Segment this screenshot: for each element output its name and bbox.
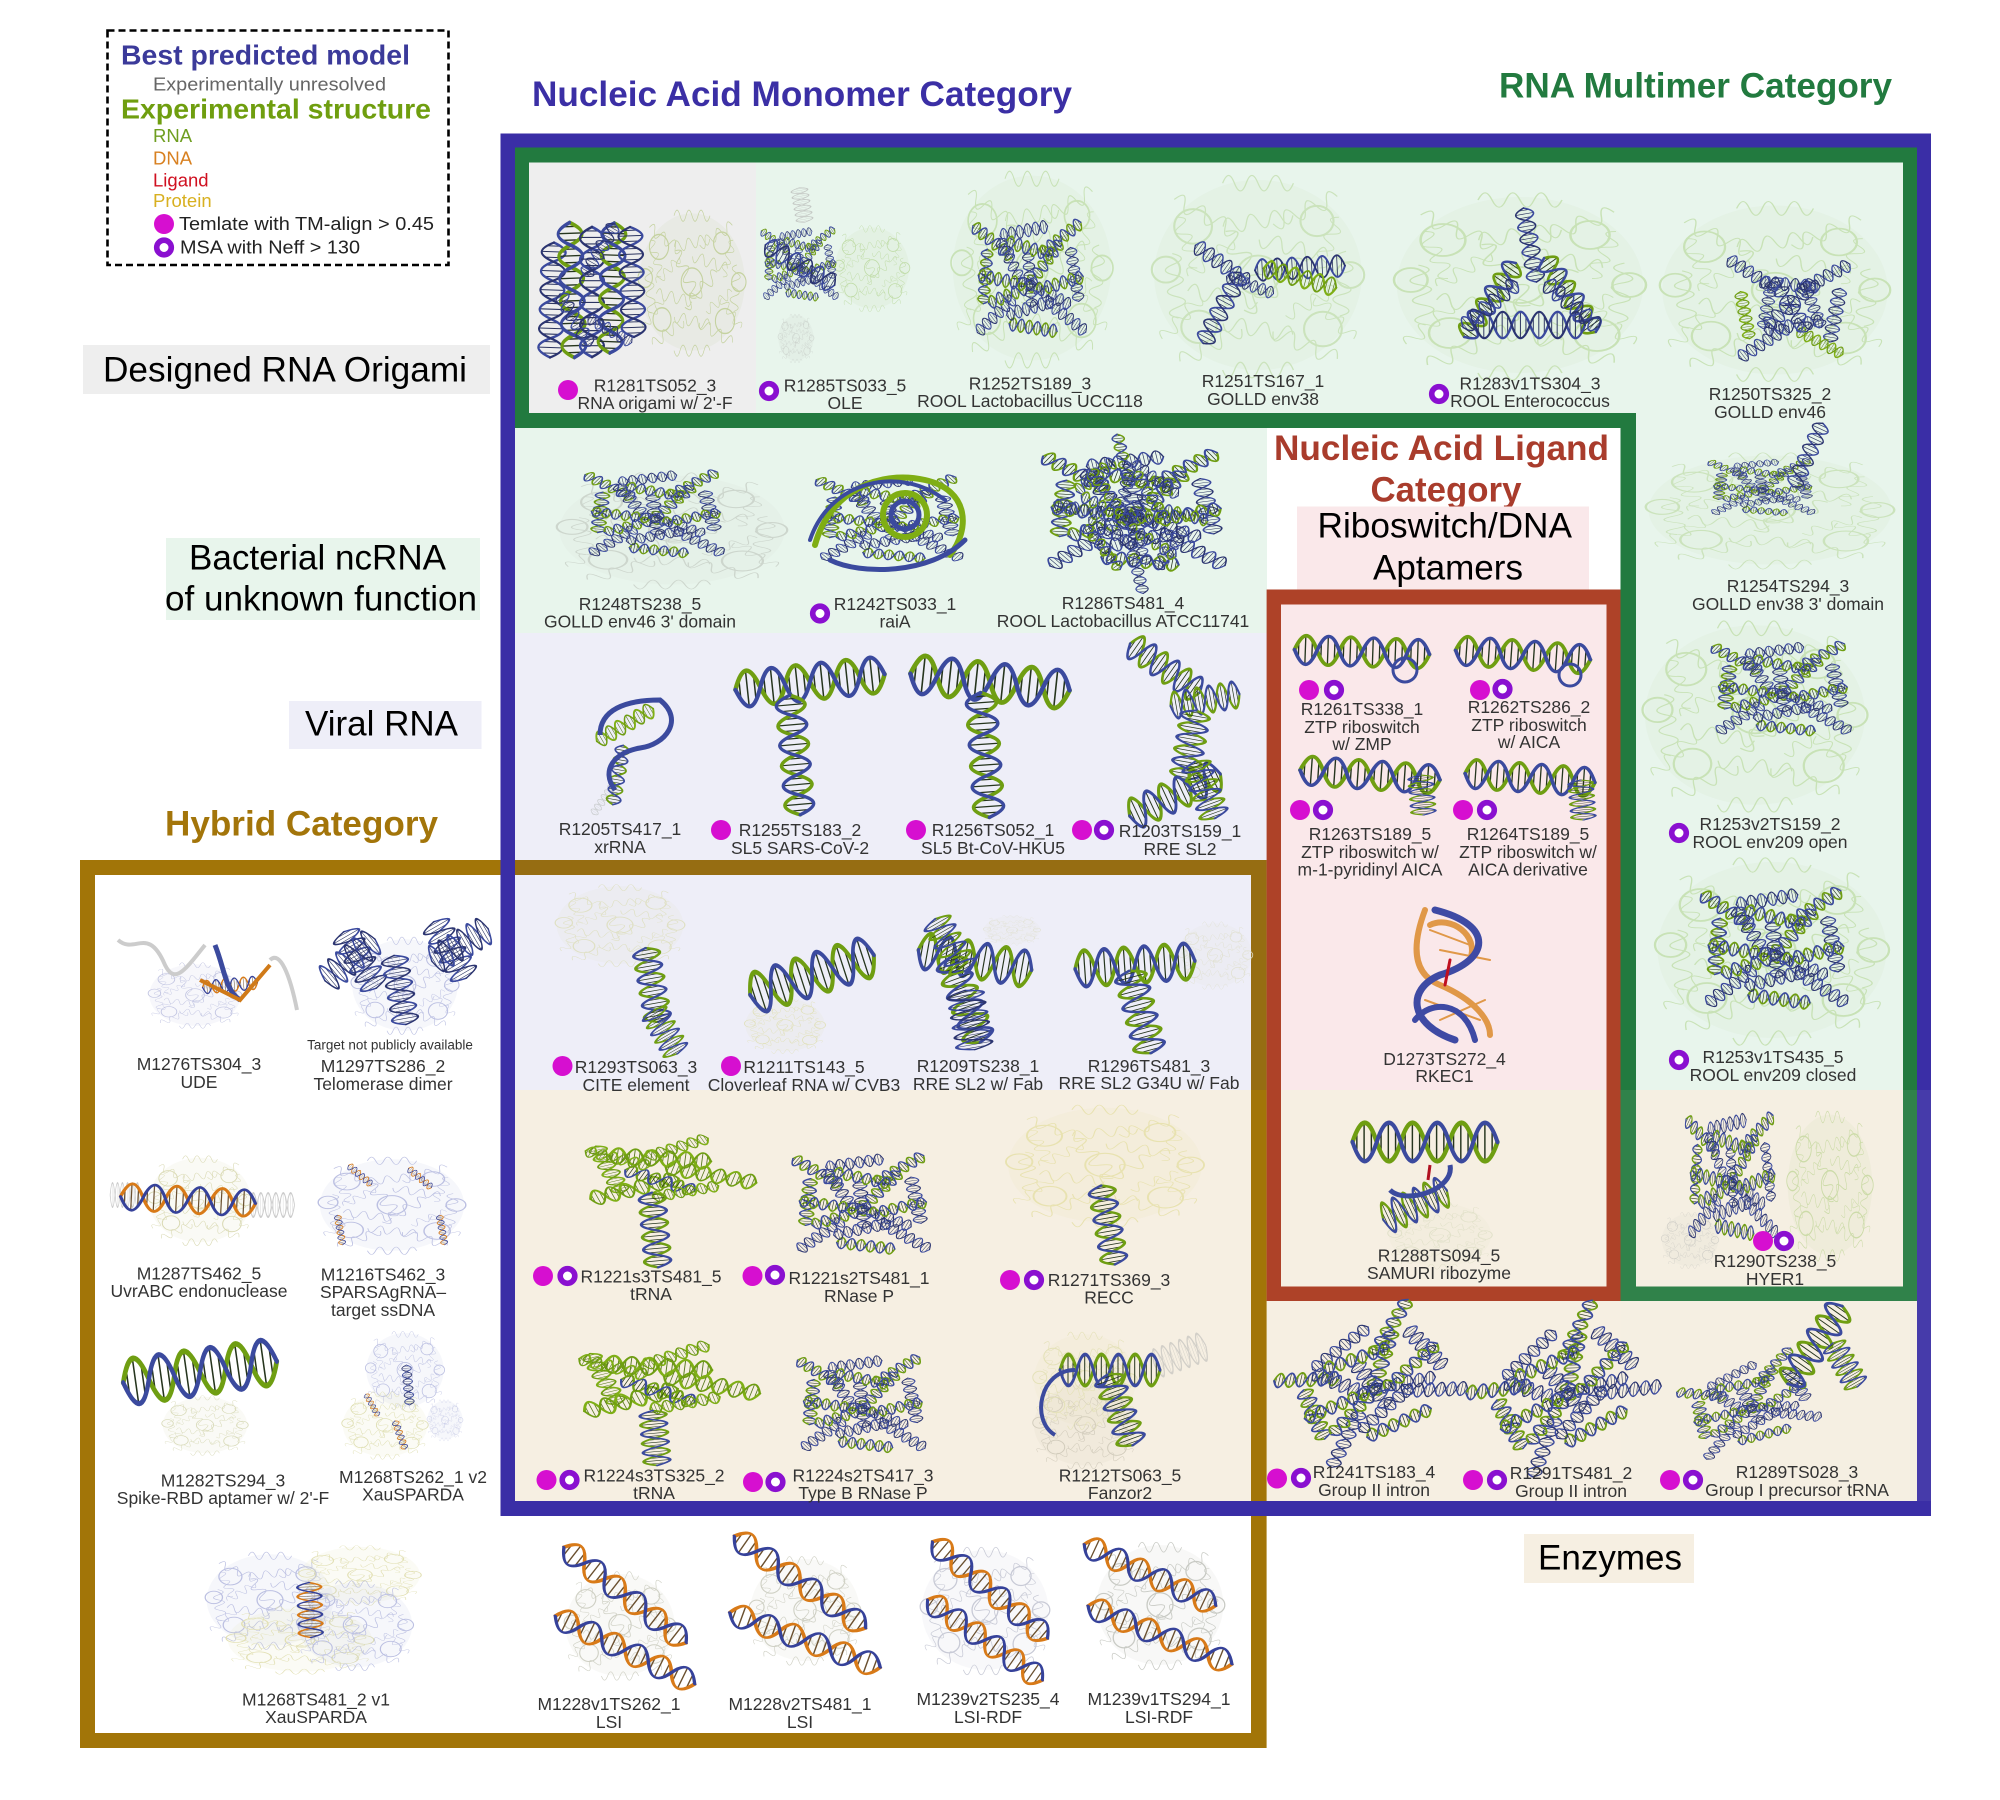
- legend: Best predicted model: [121, 40, 410, 70]
- label: R1256: R1256TS052_1: [932, 820, 1054, 841]
- panel: bacterial ncRNA background, top row: [756, 162, 1903, 413]
- structure: R1252 ROOL: [951, 171, 1113, 368]
- label: R1281: RNA origami w/ 2'-F: [577, 393, 733, 413]
- icons: markers R1264: [1453, 800, 1494, 820]
- label: R1224s2: R1224s2TS417_3: [792, 1466, 934, 1486]
- icons: markers R1291: [1463, 1470, 1504, 1490]
- label: R1291: R1291TS481_2: [1510, 1463, 1632, 1484]
- label: M1228v2: LSI: [787, 1712, 813, 1732]
- label: R1251: GOLLD env38: [1207, 389, 1319, 409]
- structure: R1255 SL5: [734, 656, 886, 816]
- legend: Experimentally unresolved: [153, 74, 386, 94]
- structure: R1253v2 ROOL open: [1642, 621, 1868, 812]
- icon: template marker R1256: [906, 820, 926, 840]
- label: R1285: OLE: [827, 393, 863, 413]
- icons: markers R1263: [1290, 800, 1330, 820]
- label: R1254: GOLLD env38 3' domain: [1692, 594, 1884, 614]
- label: R1221s3: tRNA: [630, 1284, 672, 1304]
- structure: R1254 GOLLD: [1646, 420, 1894, 569]
- label: R1221s2: RNase P: [824, 1286, 894, 1306]
- label: R1242: R1242TS033_1: [834, 594, 956, 615]
- structure: R1293 CITE: [555, 884, 689, 1060]
- label: R1250: R1250TS325_2: [1709, 384, 1831, 405]
- label: R1253v1: R1253v1TS435_5: [1702, 1047, 1844, 1068]
- structure: R1224s2 Type B RNase P: [794, 1353, 929, 1453]
- label: R1289: Group I precursor tRNA: [1705, 1480, 1889, 1500]
- label: R1293: R1293TS063_3: [575, 1057, 697, 1078]
- heading: nucleic acid ligand category: Nucleic Acid Ligand: [1274, 429, 1609, 468]
- label: R1263: ZTP riboswitch w/: [1301, 842, 1439, 862]
- label: R1252: R1252TS189_3: [969, 374, 1091, 394]
- structure: R1283 ROOL: [1394, 193, 1646, 380]
- label: R1224s3: R1224s3TS325_2: [583, 1466, 725, 1486]
- icons: markers R1203: [1072, 820, 1111, 840]
- frame: hybrid category: [80, 860, 1267, 1748]
- label: R1224s3: tRNA: [633, 1483, 675, 1503]
- icons: markers R1290: [1753, 1231, 1791, 1251]
- legend: MSA with Neff > 130: [180, 238, 360, 258]
- tag: enzymes: [1524, 1534, 1694, 1583]
- label: R1291: Group II intron: [1515, 1481, 1627, 1501]
- label: R1281: R1281TS052_3: [594, 376, 716, 396]
- tag: riboswitch and DNA aptamers: Riboswitch/DNA: [1318, 506, 1573, 546]
- label: M1228v1: LSI: [596, 1712, 622, 1732]
- tag: viral RNA: [289, 701, 482, 749]
- label: M1276: UDE: [181, 1072, 217, 1092]
- structure: R1291 Group II intron: [1457, 1289, 1668, 1488]
- structure: R1221s3 tRNA: [583, 1133, 759, 1269]
- label: M1287: UvrABC endonuclease: [110, 1281, 288, 1301]
- heading: nucleic acid ligand category: [1274, 429, 1609, 510]
- label: R1262: R1262TS286_2: [1468, 697, 1590, 718]
- label: R1264: R1264TS189_5: [1467, 824, 1589, 845]
- panel: bacterial ncRNA background, right column: [1636, 413, 1903, 1090]
- label: R1261: ZTP riboswitch: [1304, 717, 1420, 737]
- label: R1264: AICA derivative: [1468, 860, 1588, 880]
- structure: M1216 SPARSA: [318, 1157, 466, 1255]
- icon: MSA marker R1283: [1432, 387, 1446, 401]
- structure: R1281 origami: [538, 210, 746, 358]
- label: R1263: m-1-pyridinyl AICA: [1298, 860, 1443, 880]
- label: R1241: Group II intron: [1318, 1480, 1430, 1500]
- structure: R1209 RRE: [915, 912, 1041, 1053]
- label: D1273: RKEC1: [1415, 1066, 1474, 1086]
- structure: M1228v1 LSI: [550, 1538, 700, 1694]
- tag: bacterial ncRNA: Bacterial ncRNA: [189, 538, 447, 578]
- label: R1296: R1296TS481_3: [1088, 1056, 1210, 1077]
- legend: RNA: [153, 125, 193, 146]
- label: R1293: CITE element: [583, 1075, 690, 1095]
- label: M1268 v2: XauSPARDA: [362, 1484, 464, 1504]
- structure: R1296 RRE: [1074, 922, 1253, 1057]
- label: R1283: ROOL Enterococcus: [1450, 391, 1610, 411]
- label: R1286: ROOL Lactobacillus ATCC11741: [997, 611, 1249, 631]
- frame: nucleic acid monomer category: [500, 134, 1931, 1516]
- overlay: enzymes tint on multimer and monomer frames: [1620, 1090, 1931, 1501]
- note: target not publicly available: Target not publicly available: [307, 1038, 473, 1052]
- label: R1253v2: ROOL env209 open: [1692, 832, 1848, 852]
- label: M1216: target ssDNA: [331, 1300, 435, 1320]
- label: R1271: R1271TS369_3: [1048, 1270, 1170, 1291]
- icons: markers R1221s2: [742, 1266, 782, 1286]
- label: M1268 v1: XauSPARDA: [265, 1707, 367, 1727]
- label: R1283: R1283v1TS304_3: [1459, 374, 1601, 394]
- label: M1282: Spike-RBD aptamer w/ 2'-F: [117, 1488, 329, 1508]
- structure: R1224s3 tRNA: [576, 1340, 763, 1467]
- label: R1205: R1205TS417_1: [559, 819, 681, 840]
- structure: R1261 ZTP riboswitch: [1294, 635, 1430, 682]
- label: M1239v1: LSI-RDF: [1125, 1707, 1193, 1727]
- tag: bacterial ncRNA: [165, 538, 480, 620]
- structure: R1248 GOLLD: [557, 468, 787, 589]
- heading: hybrid category: Hybrid Category: [165, 804, 439, 844]
- label: R1248: GOLLD env46 3' domain: [544, 612, 736, 632]
- structure: R1256 SL5: [908, 655, 1072, 818]
- legend: Ligand: [153, 170, 209, 190]
- label: M1268 v1: M1268TS481_2 v1: [242, 1690, 390, 1710]
- icons: markers R1289: [1660, 1470, 1700, 1490]
- structure: R1271 RECC: [1006, 1105, 1204, 1267]
- label: M1228v1: M1228v1TS262_1: [537, 1694, 681, 1715]
- label: R1248: R1248TS238_5: [579, 594, 701, 615]
- label: R1296: RRE SL2 G34U w/ Fab: [1059, 1073, 1239, 1093]
- icon: MSA marker R1285: [762, 384, 776, 398]
- label: R1288: R1288TS094_5: [1378, 1246, 1500, 1266]
- label: R1263: R1263TS189_5: [1309, 824, 1431, 845]
- tag: designed RNA origami: Designed RNA Origami: [103, 350, 467, 390]
- label: R1221s3: R1221s3TS481_5: [580, 1266, 722, 1288]
- structure: M1239v1 LSI-RDF: [1079, 1534, 1236, 1675]
- label: R1264: ZTP riboswitch w/: [1459, 842, 1597, 862]
- legend: DNA: [153, 148, 193, 168]
- structure: M1268 v2 XauSPARDA: [342, 1331, 463, 1459]
- structure: R1241 Group II intron: [1266, 1289, 1474, 1477]
- label: M1239v1: M1239v1TS294_1: [1087, 1689, 1231, 1710]
- label: M1282: M1282TS294_3: [161, 1470, 285, 1492]
- label: R1255: R1255TS183_2: [739, 820, 861, 841]
- legend: Temlate with TM-align > 0.45: [179, 214, 434, 234]
- structure: R1250 GOLLD: [1660, 201, 1890, 381]
- label: R1252: ROOL Lactobacillus UCC118: [917, 391, 1143, 411]
- label: R1261: R1261TS338_1: [1301, 699, 1423, 720]
- panel: enzymes background: [515, 1090, 1917, 1501]
- frame: hybrid overlap over viral RNA: [515, 860, 1267, 1090]
- icon: template marker R1255: [711, 820, 731, 840]
- structure: R1290 HYER1: [1661, 1110, 1873, 1269]
- legend: Experimental structure: [121, 94, 431, 124]
- label: R1209: R1209TS238_1: [917, 1056, 1039, 1077]
- tag: bacterial ncRNA: of unknown function: [165, 580, 477, 618]
- structure: R1262 ZTP riboswitch: [1455, 636, 1591, 686]
- structure: R1212 Fanzor2: [1033, 1332, 1211, 1469]
- label: R1285: R1285TS033_5: [784, 376, 906, 396]
- label: R1242: raiA: [879, 612, 911, 632]
- label: R1253v2: R1253v2TS159_2: [1699, 814, 1841, 835]
- structure: D1273 RKEC1: [1415, 910, 1490, 1040]
- icon: MSA marker R1253v1: [1672, 1053, 1686, 1067]
- label: R1254: R1254TS294_3: [1727, 576, 1849, 597]
- structure: R1288 SAMURI: [1352, 1123, 1498, 1269]
- icons: markers R1271: [1000, 1270, 1041, 1290]
- icons: markers R1262: [1470, 680, 1510, 700]
- structure: R1211 Cloverleaf: [744, 936, 880, 1054]
- label: R1288: SAMURI ribozyme: [1367, 1263, 1511, 1283]
- panel: designed RNA origami background: [529, 162, 756, 413]
- label: R1221s2: R1221s2TS481_1: [788, 1268, 930, 1289]
- tag: enzymes: Enzymes: [1538, 1538, 1682, 1578]
- structure: R1289 Group I precursor: [1671, 1298, 1868, 1466]
- structure: R1285 OLE: [759, 186, 910, 363]
- icons: markers R1224s2: [743, 1472, 783, 1492]
- label: M1268 v2: M1268TS262_1 v2: [339, 1467, 487, 1488]
- label: M1239v2: M1239v2TS235_4: [916, 1689, 1060, 1710]
- label: R1262: ZTP riboswitch: [1471, 715, 1587, 735]
- frame: nucleic acid ligand category: [1267, 590, 1620, 1301]
- label: R1261: w/ ZMP: [1331, 734, 1392, 754]
- icons: markers R1261: [1299, 680, 1341, 700]
- label: R1250: GOLLD env46: [1714, 402, 1826, 422]
- panel: riboswitch and aptamer background: [1281, 604, 1607, 1090]
- label: R1251: R1251TS167_1: [1202, 371, 1324, 392]
- label: R1290: R1290TS238_5: [1714, 1251, 1836, 1272]
- icon: template marker R1293: [552, 1056, 572, 1076]
- heading: nucleic acid ligand category: Category: [1370, 470, 1522, 510]
- tag: viral RNA: Viral RNA: [305, 704, 459, 744]
- label: R1262: w/ AICA: [1497, 732, 1560, 752]
- icons: markers R1224s3: [536, 1470, 577, 1490]
- panel: viral RNA background: [515, 633, 1267, 1090]
- structure: M1287 UvrABC: [110, 1156, 294, 1246]
- panel: bacterial ncRNA background, middle row: [515, 428, 1267, 633]
- tag: riboswitch and DNA aptamers: Aptamers: [1373, 548, 1523, 588]
- structure: R1263 ZTP riboswitch: [1299, 756, 1441, 816]
- label: R1289: R1289TS028_3: [1736, 1462, 1858, 1483]
- icons: markers R1221s3: [533, 1266, 575, 1286]
- label: R1271: RECC: [1084, 1288, 1134, 1308]
- structure: R1242 raiA: [810, 473, 966, 570]
- label: M1276: M1276TS304_3: [137, 1054, 261, 1075]
- legend: Protein: [153, 190, 212, 211]
- label: R1205: xrRNA: [594, 837, 646, 857]
- structure: R1203 RRE: [1123, 633, 1242, 830]
- structure: R1253v1 ROOL closed: [1655, 858, 1889, 1045]
- label: R1255: SL5 SARS-CoV-2: [731, 838, 869, 858]
- structure: R1221s2 RNase P: [789, 1151, 933, 1255]
- label: M1287: M1287TS462_5: [137, 1264, 261, 1284]
- label: R1290: HYER1: [1746, 1269, 1804, 1289]
- structure: M1228v2 LSI: [726, 1527, 884, 1678]
- legend: [108, 30, 448, 265]
- structure: R1205 xrRNA: [590, 700, 671, 817]
- label: R1241: R1241TS183_4: [1313, 1462, 1436, 1483]
- label: R1203: R1203TS159_1: [1119, 821, 1241, 842]
- icon: template marker R1281: [558, 380, 578, 400]
- structure: R1286 ROOL: [1038, 426, 1230, 600]
- label: M1216: SPARSAgRNA–: [320, 1282, 446, 1302]
- structure: M1282 Spike-RBD aptamer: [120, 1339, 280, 1455]
- icon: MSA marker R1253v2: [1672, 826, 1686, 840]
- label: M1228v2: M1228v2TS481_1: [728, 1694, 872, 1715]
- structure: R1264 ZTP riboswitch: [1464, 759, 1596, 821]
- heading: nucleic acid monomer category: Nucleic Acid Monomer Category: [532, 75, 1073, 114]
- label: R1212: R1212TS063_5: [1059, 1466, 1181, 1486]
- label: M1297: Telomerase dimer: [313, 1074, 453, 1094]
- label: M1216: M1216TS462_3: [321, 1264, 445, 1286]
- label: M1297: M1297TS286_2: [321, 1056, 445, 1077]
- heading: RNA multimer category: RNA Multimer Category: [1499, 66, 1893, 106]
- label: R1286: R1286TS481_4: [1062, 593, 1185, 614]
- label: R1203: RRE SL2: [1144, 839, 1216, 859]
- structure: R1251 GOLLD: [1152, 175, 1364, 378]
- frame: RNA multimer category: [515, 148, 1917, 1301]
- icon: MSA marker R1242: [813, 606, 827, 621]
- label: R1211: R1211TS143_5: [743, 1057, 865, 1078]
- structure: M1276 UDE: [118, 940, 297, 1028]
- tag: riboswitch and DNA aptamers: [1297, 506, 1589, 590]
- label: R1253v1: ROOL env209 closed: [1690, 1065, 1856, 1085]
- label: R1256: SL5 Bt-CoV-HKU5: [921, 838, 1065, 858]
- structure: M1239v2 LSI-RDF: [920, 1533, 1055, 1689]
- structure: M1268 v1 XauSPARDA: [205, 1545, 421, 1674]
- label: D1273: D1273TS272_4: [1383, 1049, 1506, 1070]
- icons: markers R1241: [1267, 1468, 1308, 1488]
- label: R1212: Fanzor2: [1088, 1483, 1152, 1503]
- icon: template marker R1211: [721, 1056, 741, 1076]
- label: R1209: RRE SL2 w/ Fab: [913, 1074, 1043, 1094]
- label: M1239v2: LSI-RDF: [954, 1707, 1022, 1727]
- structure: M1297 Telomerase: [316, 915, 495, 1035]
- label: R1211: Cloverleaf RNA w/ CVB3: [708, 1075, 900, 1095]
- label: R1224s2: Type B RNase P: [798, 1483, 928, 1503]
